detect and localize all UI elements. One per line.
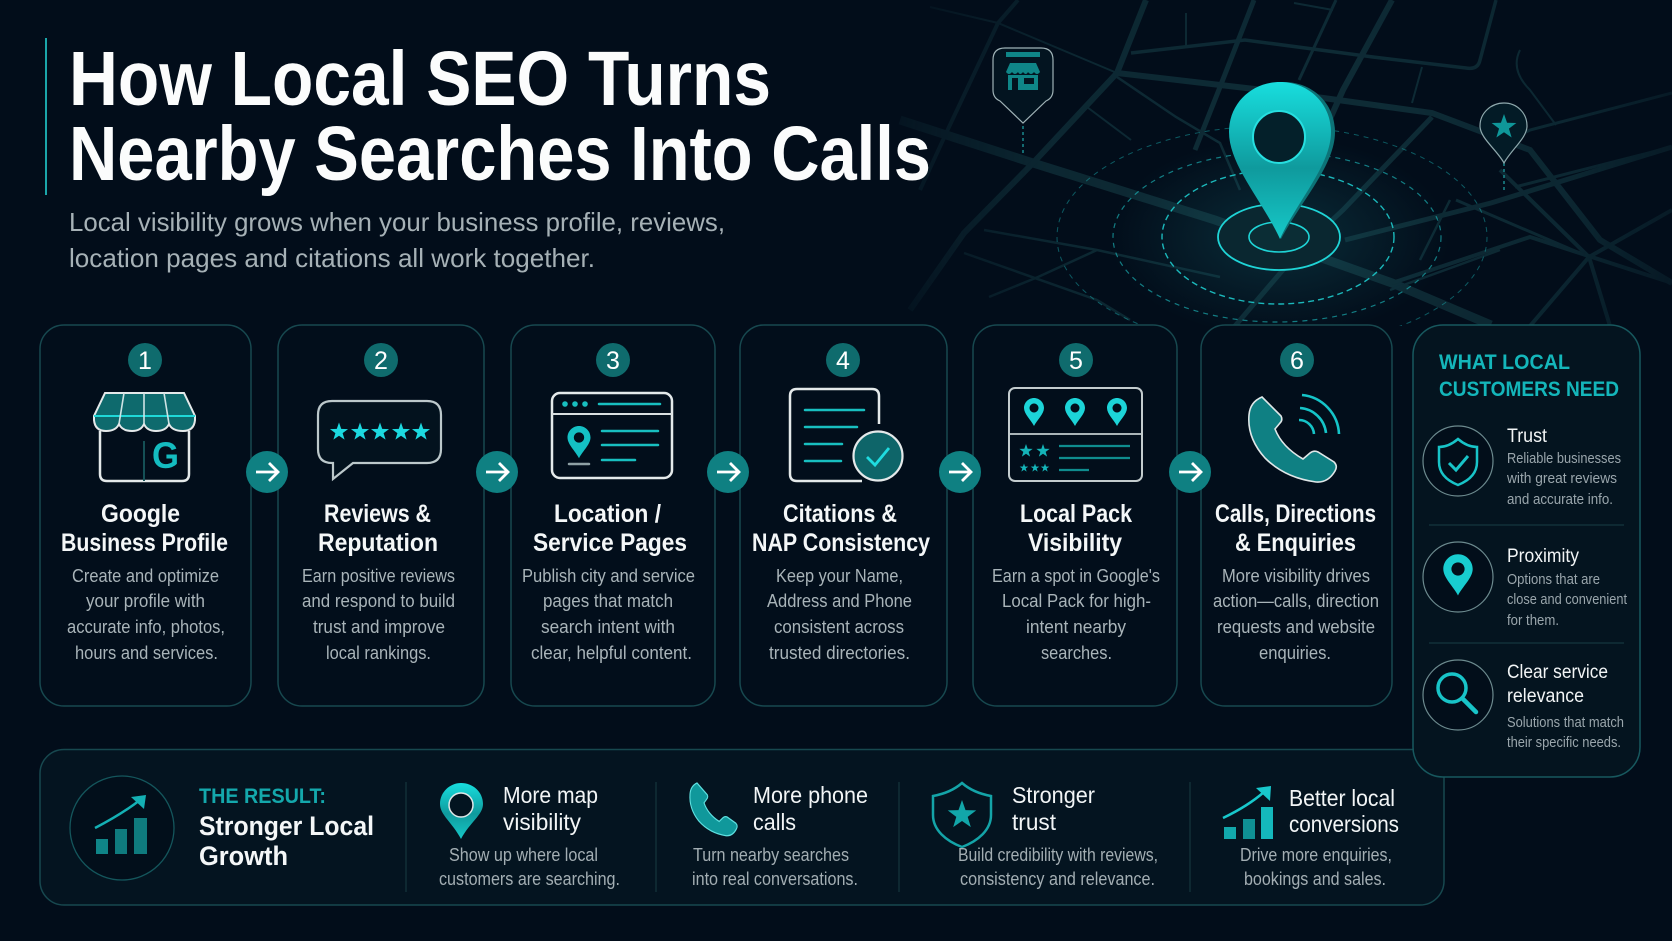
panel: step 3 Location and Service Pages [511,325,715,706]
subtitle: Local visibility grows when your business profile, reviews, [69,207,725,237]
icon: storefront: G [152,435,179,476]
need: trust: and accurate info. [1507,492,1613,508]
icon: storefront [94,393,195,481]
need: trust: Trust [1507,426,1548,447]
benefit: more phone calls: into real conversations. [692,869,858,889]
panel heading: CUSTOMERS NEED [1439,377,1619,401]
step number 2 [364,343,398,377]
map illustration [900,0,1672,348]
step title: Google [101,500,180,528]
benefit: better local conversions [1223,785,1399,889]
benefit: more map visibility: Show up where local [449,845,598,865]
step title: Reputation [318,529,438,557]
result heading: THE RESULT: [199,785,326,808]
subtitle [69,207,725,273]
step description: Create and optimize [72,566,219,586]
step description: requests and website [1217,617,1375,637]
panel: the result [40,750,1444,905]
step title [752,500,930,557]
need: trust: with great reviews [1506,471,1617,487]
arrow 2 to 3 [476,451,518,493]
step description: hours and services. [75,643,218,663]
need: trust: Reliable businesses [1507,451,1621,467]
icon: review bubble [318,401,441,479]
step description: action—calls, direction [1213,591,1379,611]
step description [522,566,695,663]
need: proximity: Options that are [1507,572,1600,588]
step description: trust and improve [313,617,445,637]
benefit: more phone calls: More phone [753,782,868,808]
icon: document with check [790,389,902,481]
benefit: more map visibility [439,782,620,889]
step description: your profile with [86,591,205,611]
need: proximity: close and convenient [1507,592,1627,608]
icon: local pack listing [1009,388,1142,481]
step description [302,566,455,663]
step description: accurate info, photos, [67,617,225,637]
step title [533,500,687,557]
subtitle: location pages and citations all work together. [69,243,595,273]
step number 6 [1280,343,1314,377]
step number 3: 3 [606,347,620,375]
benefit: more map visibility: visibility [503,809,581,835]
title: Nearby Searches Into Calls [69,111,931,197]
need: clear service relevance [1423,660,1624,751]
step description: pages that match [543,591,673,611]
step title [318,500,438,557]
step description: local rankings. [326,643,431,663]
step title [1020,500,1132,557]
need: clear service relevance: Solutions that match [1507,715,1624,731]
step number 1 [128,343,162,377]
step number 4 [826,343,860,377]
benefit: more map visibility: customers are searching. [439,869,620,889]
step description [1213,566,1379,663]
step number 2: 2 [374,347,388,375]
arrow 4 to 5 [939,451,981,493]
icon: main location pin [1229,82,1335,239]
panel: step 4 Citations and NAP Consistency [740,325,947,706]
benefit: stronger trust: consistency and relevance. [960,869,1155,889]
benefit: stronger trust: trust [1012,809,1057,835]
step description: enquiries. [1259,643,1331,663]
step title: Calls, Directions [1215,500,1376,528]
panel: step 6 Calls, Directions and Enquiries [1201,325,1392,706]
street map [900,0,1672,326]
need: proximity: for them. [1507,613,1559,629]
panel: step 1 Google Business Profile [40,325,251,706]
step number 5: 5 [1069,347,1083,375]
step title: Visibility [1028,529,1122,557]
step title [1215,500,1376,557]
step description: Local Pack for high- [1002,591,1151,611]
step description [767,566,912,663]
step title: Citations & [783,500,897,528]
arrow 1 to 2 [246,451,288,493]
step description [67,566,225,663]
step description: trusted directories. [769,643,910,663]
panel: what local customers need [1413,325,1640,777]
benefit: stronger trust: Stronger [1012,782,1095,808]
step title: Service Pages [533,529,687,557]
step description: clear, helpful content. [531,643,692,663]
title accent bar [45,38,47,195]
step description: Keep your Name, [776,566,903,586]
step number 4: 4 [836,347,850,375]
step title: Location / [554,500,661,528]
step description: consistent across [774,617,904,637]
result heading: Stronger Local [199,811,374,841]
step number 1: 1 [138,347,152,375]
benefit: more map visibility: More map [503,782,598,808]
benefit: stronger trust: Build credibility with reviews, [958,845,1158,865]
icon: store map pin [993,48,1053,153]
step description: and respond to build [302,591,455,611]
radar rings [1056,128,1488,326]
title [69,36,931,197]
icon: star map pin [1480,103,1527,190]
benefit: more phone calls [690,782,868,889]
need: proximity [1423,542,1627,629]
step title: NAP Consistency [752,529,930,557]
benefit: stronger trust [933,782,1158,889]
panel heading [1439,350,1619,401]
benefit: better local conversions: Drive more enquiries, [1240,845,1392,865]
need: proximity: Proximity [1507,546,1579,567]
step number 6: 6 [1290,347,1304,375]
step title: Local Pack [1020,500,1132,528]
result heading: Growth [199,841,288,871]
step title: & Enquiries [1235,529,1356,557]
step number 5 [1059,343,1093,377]
step title: Business Profile [61,529,228,557]
step description: intent nearby [1026,617,1126,637]
glow [1152,167,1405,312]
step description: searches. [1041,643,1112,663]
step description [992,566,1160,663]
benefit: better local conversions: conversions [1289,811,1399,837]
title: How Local SEO Turns [69,36,771,122]
benefit: more phone calls: calls [753,809,796,835]
benefit: better local conversions: bookings and sales. [1244,869,1386,889]
arrow 3 to 4 [707,451,749,493]
icon: web page with pin [552,393,672,478]
benefit: better local conversions: Better local [1289,785,1395,811]
panel: step 5 Local Pack Visibility [973,325,1177,706]
benefit: more phone calls: Turn nearby searches [693,845,849,865]
step description: Earn a spot in Google's [992,566,1160,586]
step description: Publish city and service [522,566,695,586]
need: clear service relevance: relevance [1507,686,1584,707]
step description: Earn positive reviews [302,566,455,586]
step description: More visibility drives [1222,566,1370,586]
panel heading: WHAT LOCAL [1439,350,1570,374]
need: clear service relevance: Clear service [1507,662,1608,683]
result heading [199,785,374,871]
need: clear service relevance: their specific needs. [1507,735,1621,751]
icon: phone with signal [1249,395,1339,482]
step description: search intent with [541,617,675,637]
step description: Address and Phone [767,591,912,611]
panel: step 2 Reviews and Reputation [278,325,484,706]
icon: growth chart [70,776,174,880]
step title [61,500,228,557]
arrow 5 to 6 [1169,451,1211,493]
step title: Reviews & [324,500,431,528]
need: trust [1423,426,1621,508]
step number 3 [596,343,630,377]
